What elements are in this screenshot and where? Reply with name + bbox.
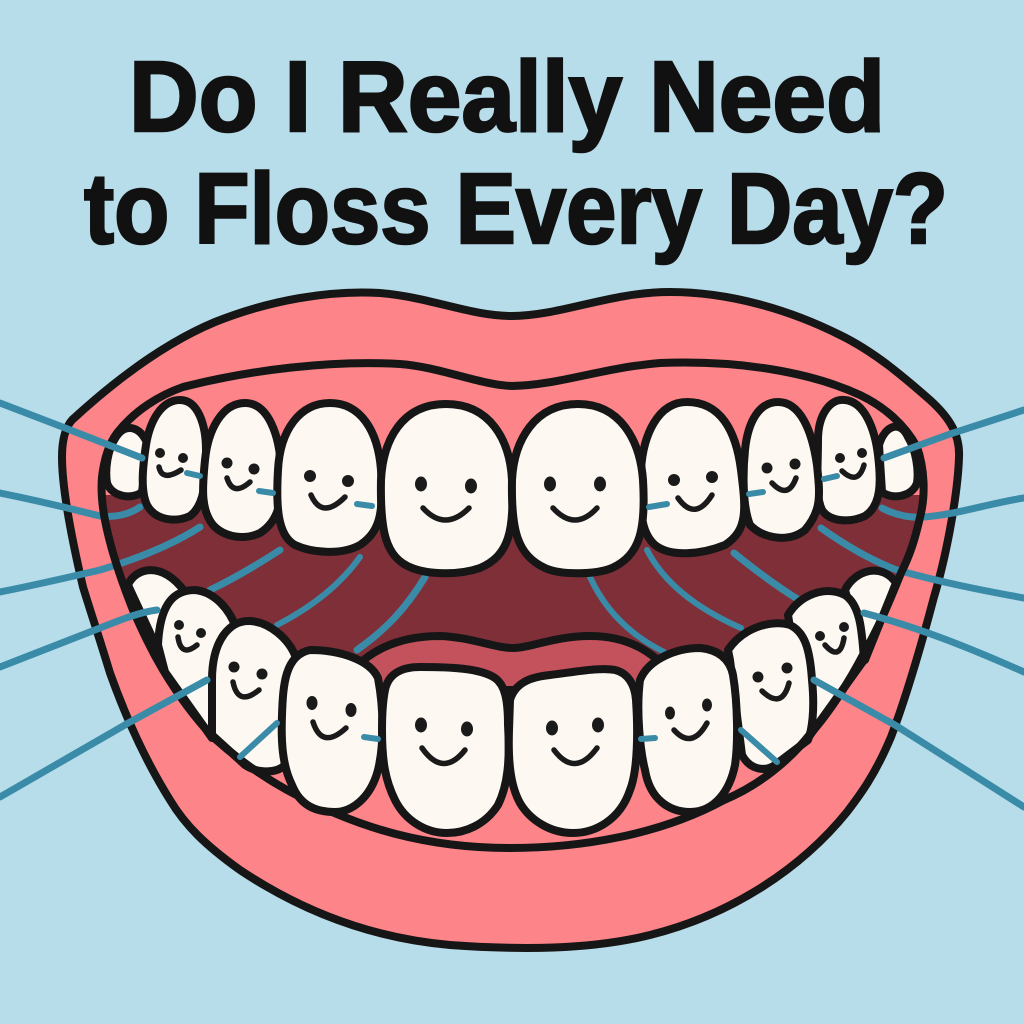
lips [62, 292, 959, 948]
title: to Floss Every Day? [84, 153, 948, 265]
lower teeth [282, 648, 737, 833]
floss strands in front of teeth [0, 403, 1024, 807]
long floss strands behind teeth [0, 493, 1024, 652]
mouth interior [106, 495, 920, 693]
title: Do I Really Need [129, 41, 885, 153]
mouth outline [102, 363, 924, 848]
far lower teeth [128, 570, 896, 771]
smiley faces on teeth [155, 448, 867, 764]
title [84, 41, 948, 265]
upper teeth [106, 400, 918, 573]
